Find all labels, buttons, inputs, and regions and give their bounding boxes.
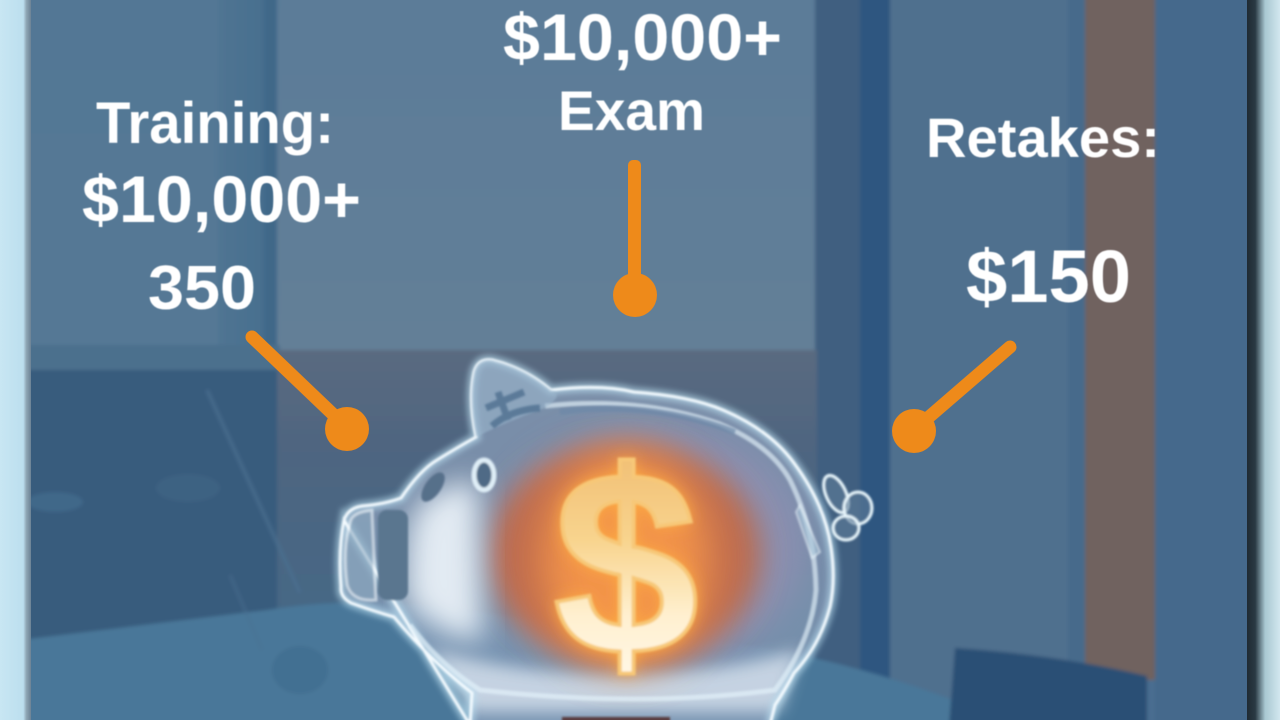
piggy eye <box>474 460 494 490</box>
piggy bottom glow <box>430 650 800 712</box>
right frame edge <box>1247 0 1280 720</box>
piggy ear <box>471 360 557 437</box>
heading: training cost: $10,000+ <box>82 162 361 236</box>
piggy interior lavender <box>495 425 805 665</box>
heading: retakes cost <box>926 106 1160 318</box>
piggy inner contour <box>410 403 816 699</box>
icon: glass piggy bank with glowing dollar <box>340 360 872 720</box>
piggy outer glow <box>340 360 833 720</box>
piggy eye slit <box>417 468 449 506</box>
piggy top shadow band <box>560 409 735 432</box>
heading: exam cost <box>503 0 782 142</box>
piggy snout ring <box>345 510 376 600</box>
heading: exam cost: Exam <box>558 79 705 142</box>
arrow: exam connector <box>613 160 657 317</box>
arrow: training connector <box>252 337 369 451</box>
piggy base shadow <box>562 717 670 720</box>
piggy tail <box>818 472 872 540</box>
piggy body fill <box>340 360 833 720</box>
piggy side panel <box>796 505 820 558</box>
piggy snout highlight <box>406 482 482 640</box>
piggy nostril panel <box>378 510 408 600</box>
left frame edge <box>0 0 31 720</box>
dollar halo <box>541 452 711 668</box>
heading: training cost <box>82 91 361 323</box>
dollar glow: $ <box>553 417 699 710</box>
heading: training cost: Training: <box>96 91 334 156</box>
heading: exam cost: $10,000+ <box>503 0 782 74</box>
dollar sign: $ <box>553 417 699 710</box>
piggy outline <box>340 360 833 720</box>
piggy ear dark stripes <box>486 392 540 426</box>
heading: training cost: 350 <box>148 254 256 323</box>
heading: retakes cost: $150 <box>966 235 1131 318</box>
piggy interior orange <box>490 443 760 667</box>
heading: retakes cost: Retakes: <box>926 106 1160 169</box>
arrow: retakes connector <box>892 347 1010 453</box>
